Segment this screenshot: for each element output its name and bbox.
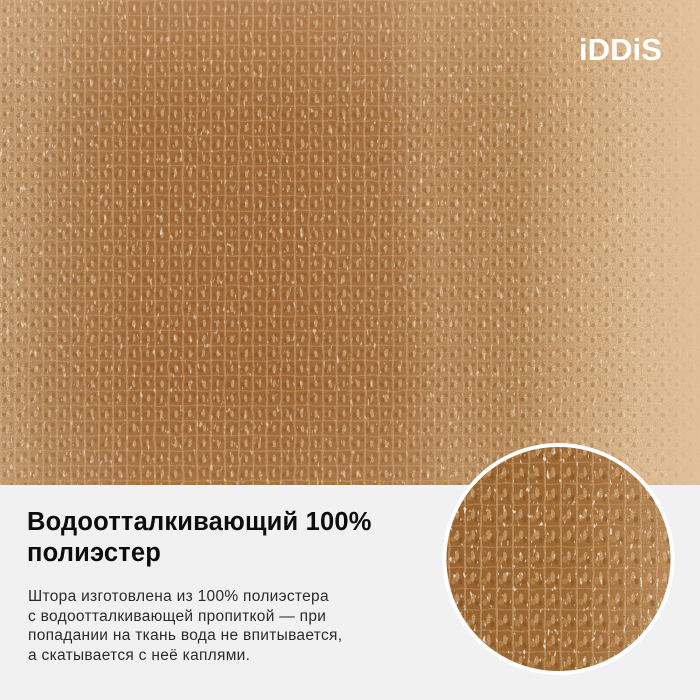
body text	[28, 588, 342, 664]
heading	[27, 508, 372, 567]
logo: IDDIS: ®	[658, 33, 662, 39]
body text: а скатывается с неё каплями.	[28, 647, 250, 664]
body text: с водоотталкивающей пропиткой — при	[28, 608, 326, 625]
heading: Водоотталкивающий 100%	[27, 508, 372, 536]
body text: попадании на ткань вода не впитывается,	[28, 627, 342, 644]
logo: IDDIS: iDDiS	[579, 32, 662, 67]
panel: text background	[0, 485, 700, 700]
circular fabric close-up	[442, 443, 674, 675]
heading: полиэстер	[27, 539, 161, 567]
body text: Штора изготовлена из 100% полиэстера	[28, 588, 329, 605]
